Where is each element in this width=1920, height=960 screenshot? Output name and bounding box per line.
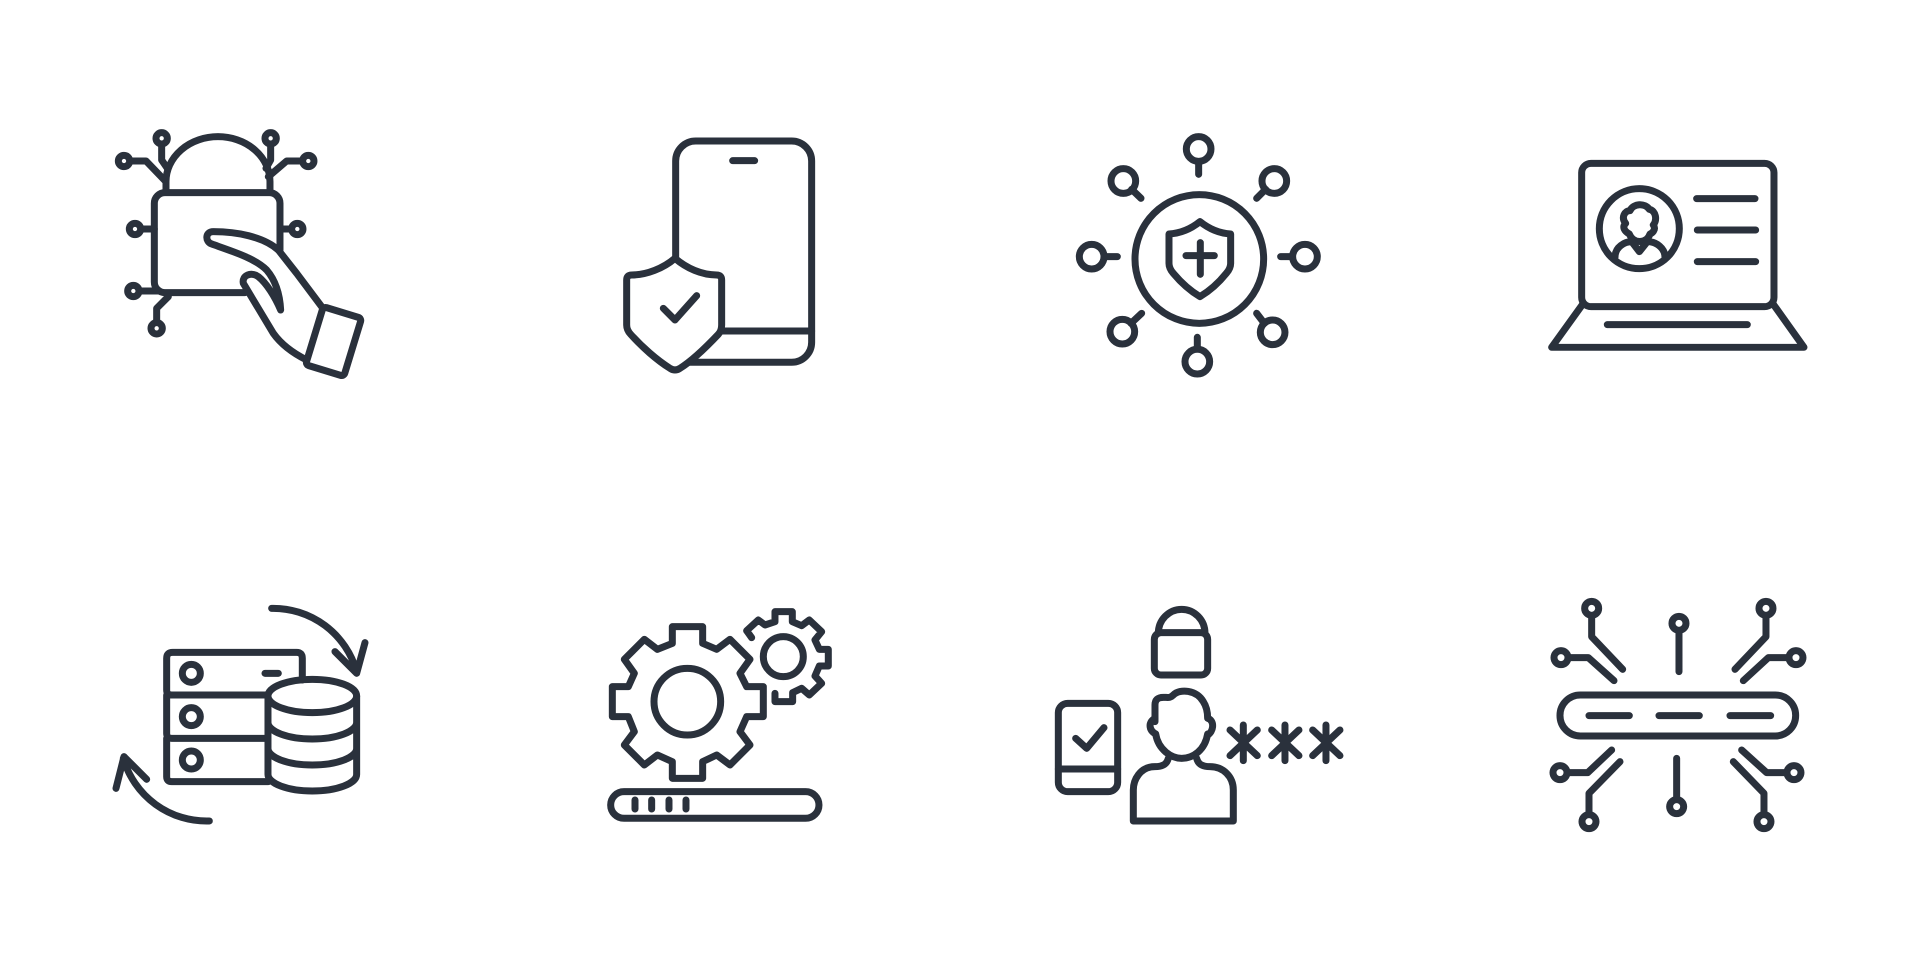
icon: server and database sync	[116, 608, 365, 821]
icon: gears with progress bar	[611, 612, 828, 818]
icon: laptop with user profile	[1552, 163, 1804, 347]
icon: circuit connector bar	[1553, 601, 1803, 829]
icon: phone with shield check	[627, 141, 812, 370]
icon: user authentication with lock, phone and password	[1058, 609, 1340, 821]
icon: shield network hub	[1079, 137, 1317, 374]
icon: hand holding circuit padlock	[118, 133, 362, 376]
